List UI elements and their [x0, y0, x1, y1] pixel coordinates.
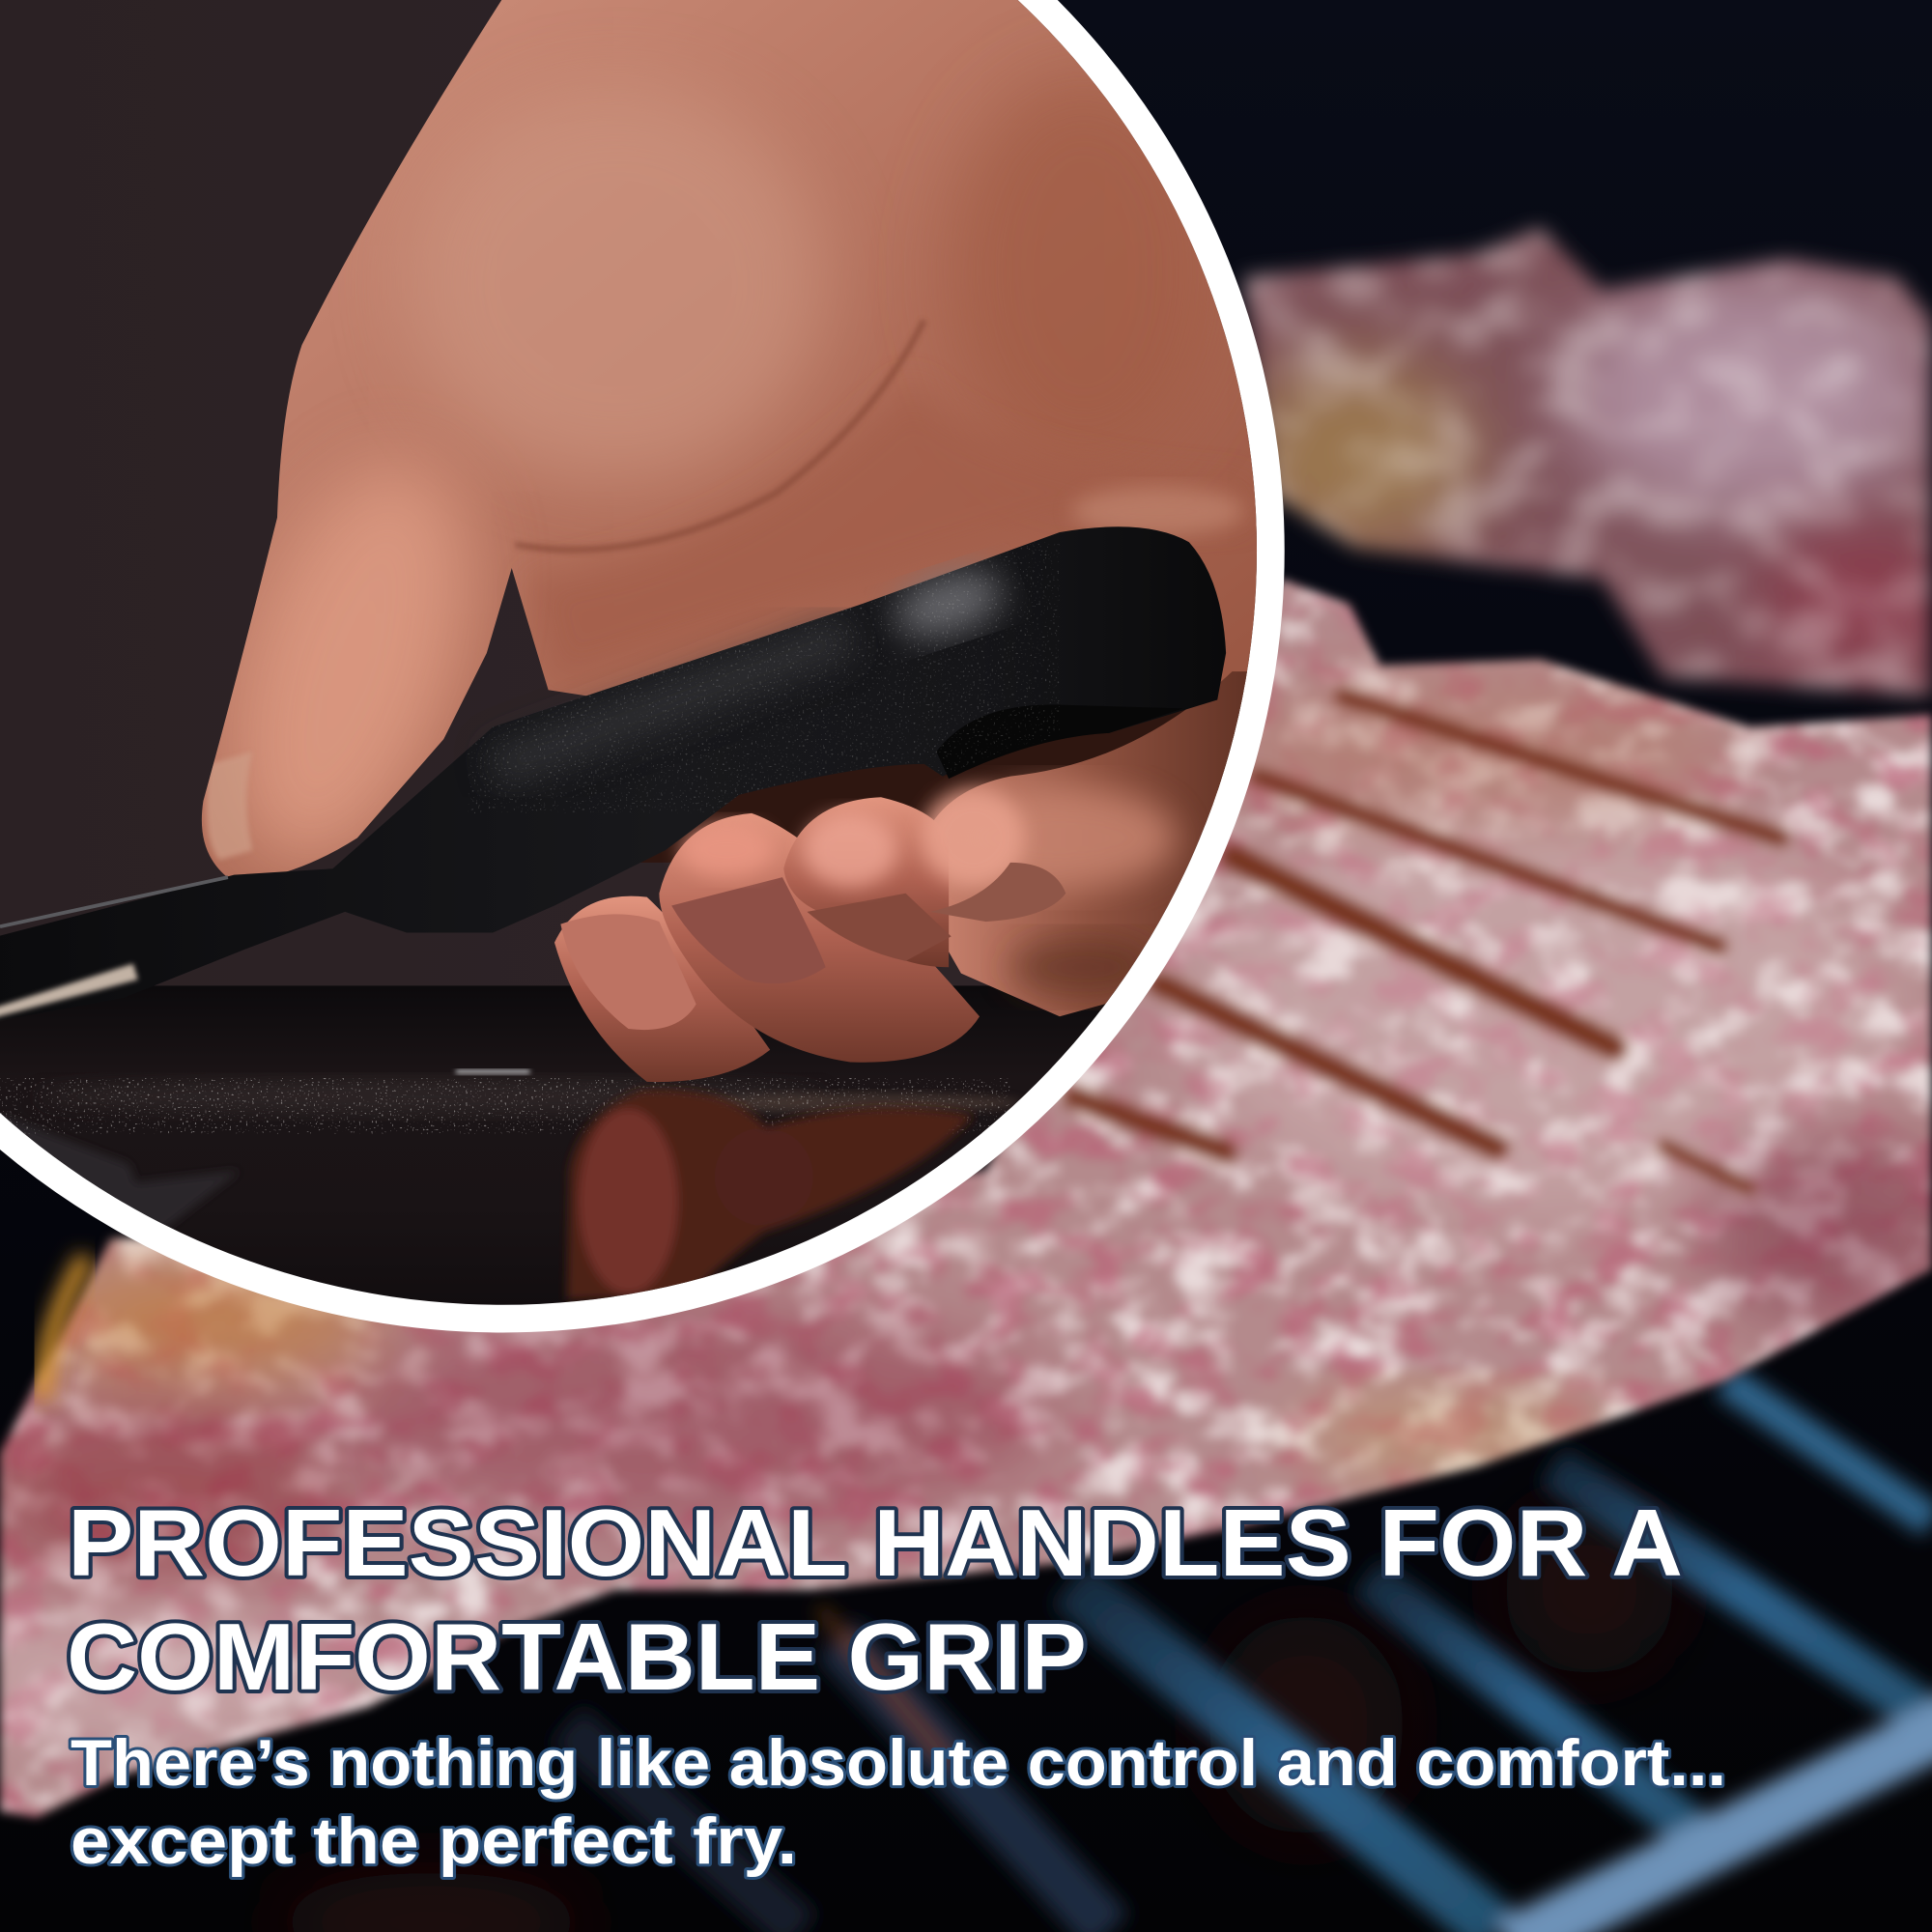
reflective surface	[0, 985, 1119, 1305]
upper steak, out of focus	[1233, 222, 1932, 715]
handle	[0, 526, 1226, 1023]
headline line 1: PROFESSIONAL HANDLES FOR A	[68, 1490, 1683, 1596]
spatula slot highlight	[0, 963, 138, 1018]
finger 3	[783, 797, 949, 967]
headline line 2: COMFORTABLE GRIP	[67, 1604, 1087, 1710]
dark wall behind	[0, 0, 1343, 1010]
subheading	[71, 1726, 1726, 1878]
main steak, out of focus	[0, 567, 1932, 1848]
sear marks	[1072, 696, 1780, 1189]
subheading line 2: except the perfect fry.	[71, 1804, 797, 1878]
finger 4 tip and nail	[922, 788, 1065, 922]
circular inset: hand gripping the spatula handle	[0, 0, 1355, 1355]
far right finger base	[912, 671, 1269, 1016]
shadow under handle	[518, 640, 1244, 863]
fat edge highlight	[43, 1257, 86, 1399]
finger reflection	[567, 1090, 974, 1300]
grill bars	[567, 1380, 1932, 1932]
whole hand: palm and thumb	[201, 0, 1258, 877]
headline	[67, 1490, 1683, 1710]
subheading line 1: There’s nothing like absolute control and comfort...	[71, 1726, 1726, 1800]
speckled streaks	[456, 1069, 529, 1074]
thumb highlight	[186, 434, 516, 897]
white ring	[0, 0, 1269, 1318]
grill embers	[271, 1503, 1676, 1932]
finger 1 (left)	[554, 896, 770, 1082]
finger 2	[659, 813, 980, 1063]
